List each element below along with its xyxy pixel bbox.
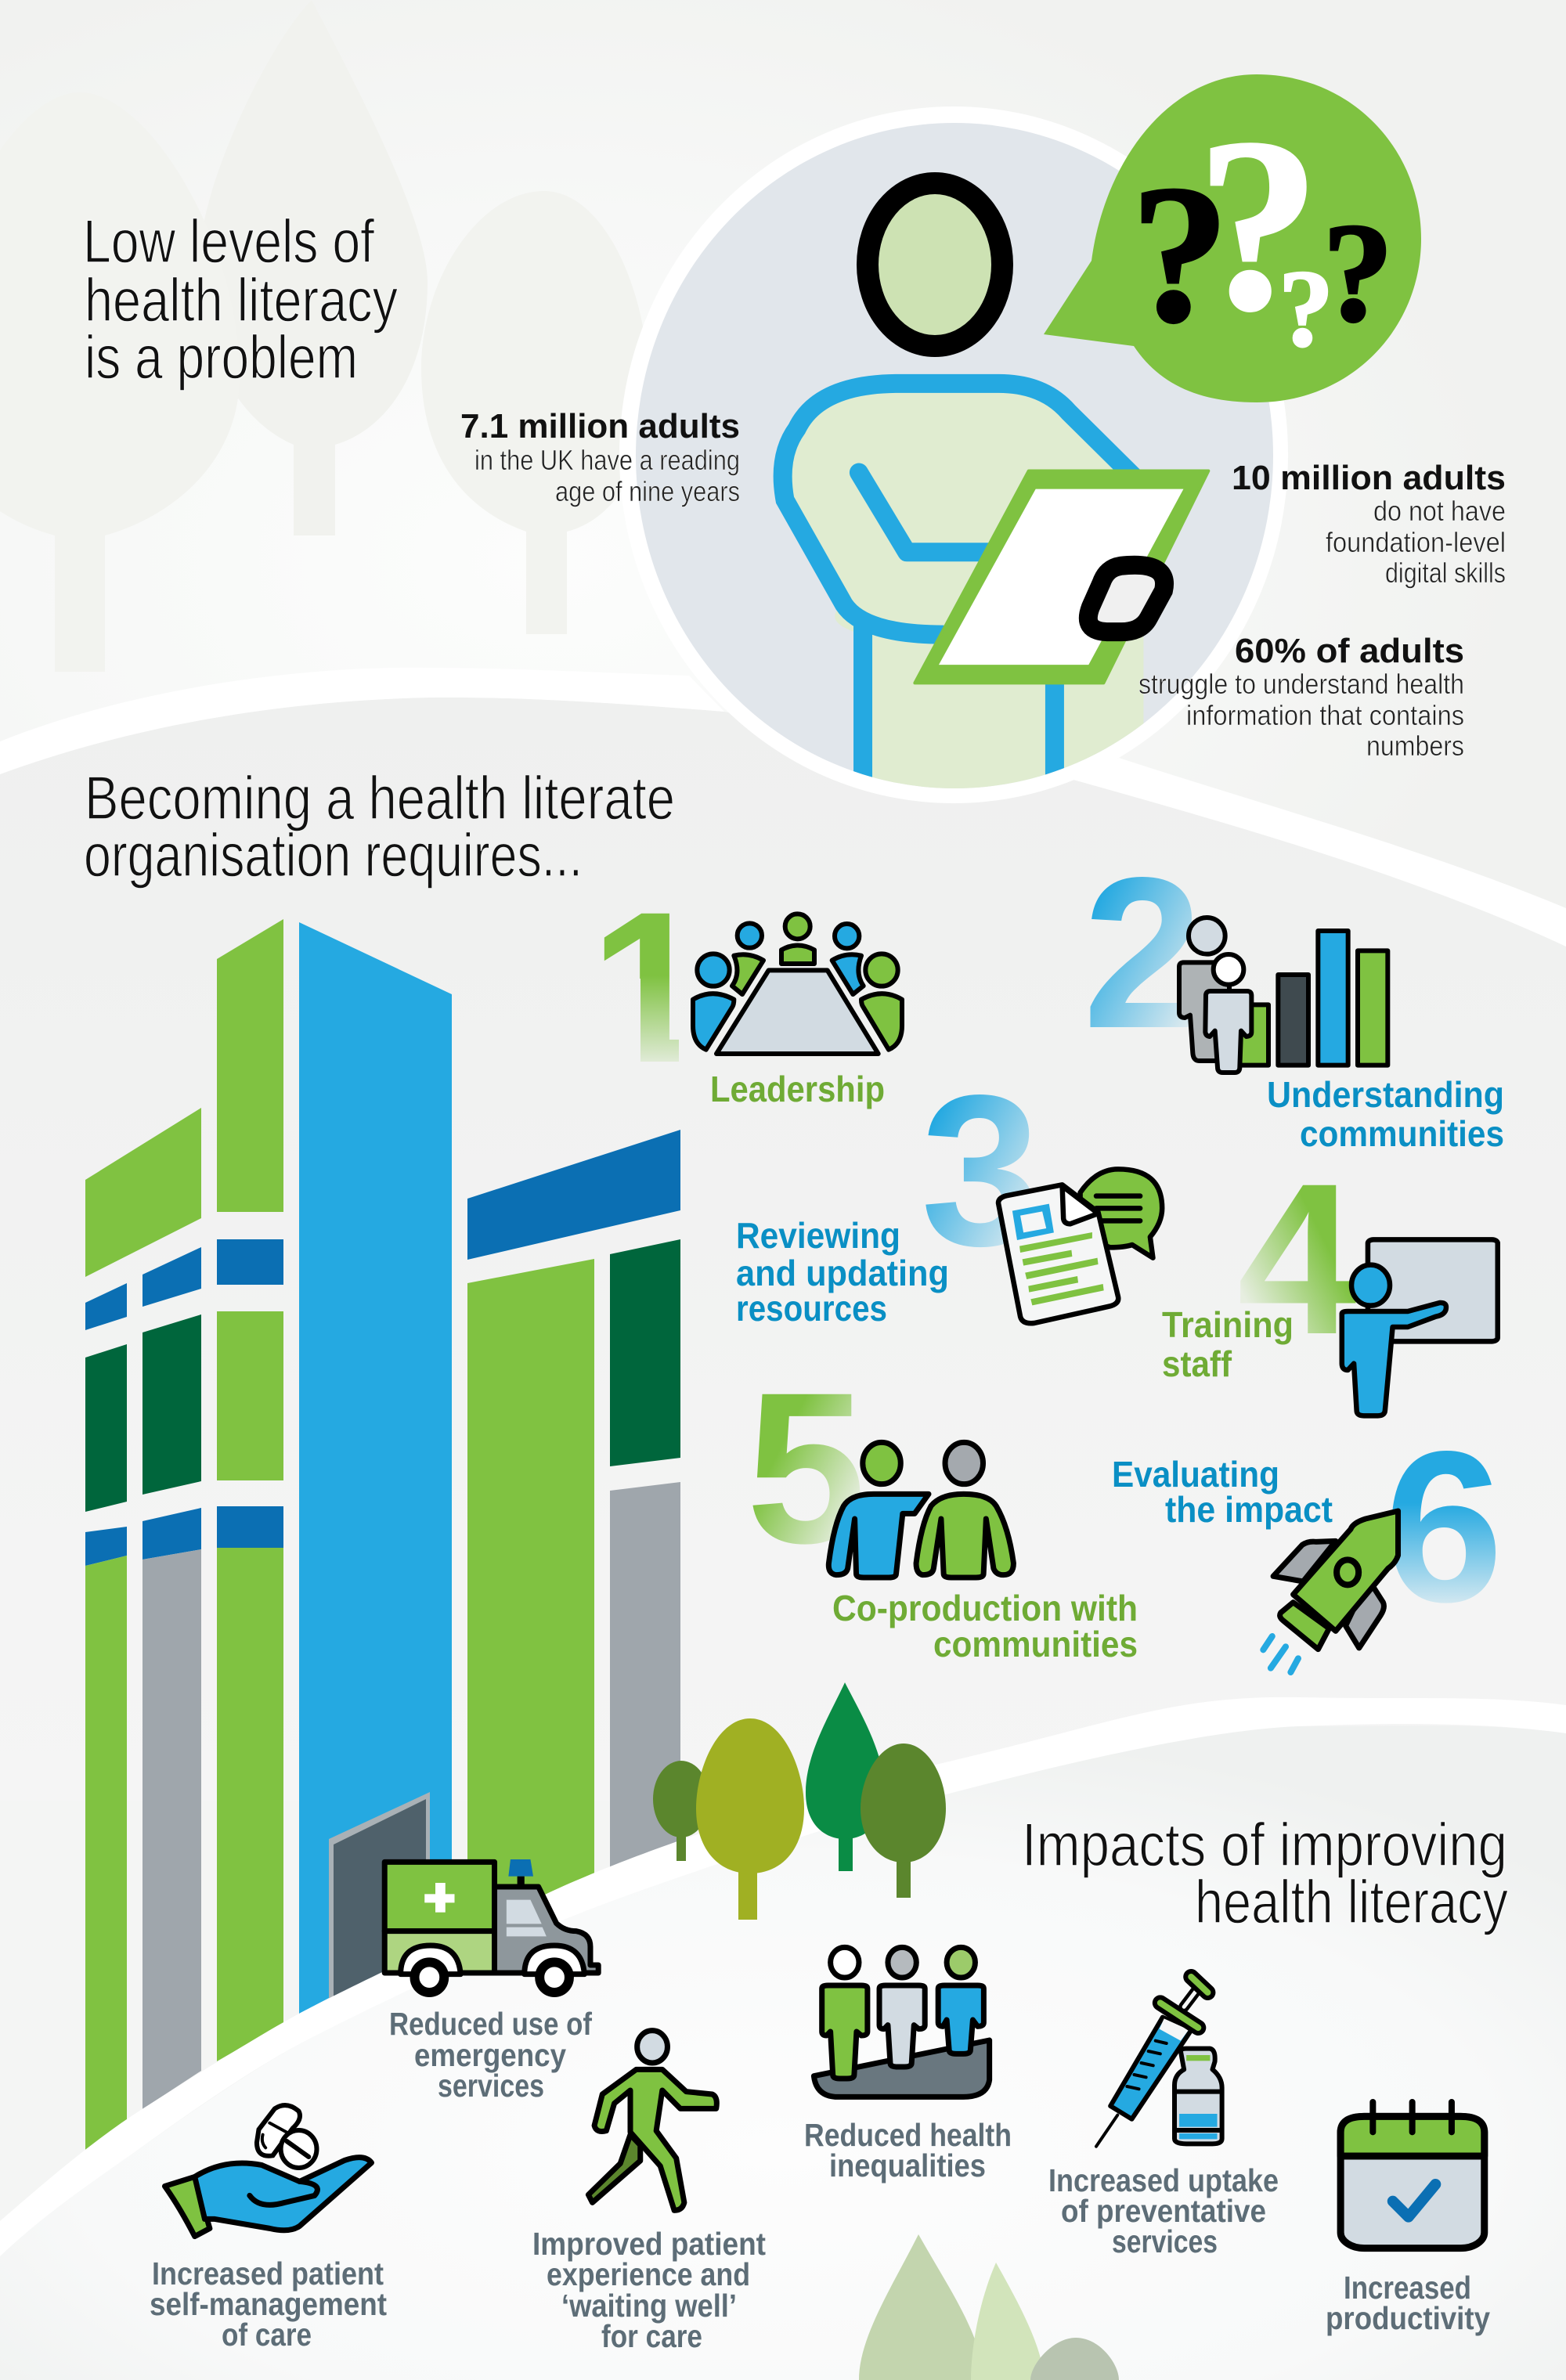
heading: impacts of improving health literacy [1022, 1810, 1508, 1936]
stat: 10 million adults: 10 million adults [1232, 459, 1506, 497]
speech bubble with question marks: ? [1131, 144, 1229, 363]
speech bubble with question marks [1044, 74, 1421, 402]
number 1: 1 [590, 867, 709, 1108]
icon: ambulance [384, 1859, 598, 1992]
number 6: 6 [1384, 1407, 1503, 1647]
label: increased uptake of preventative services: services [1112, 2223, 1218, 2259]
label: co-production with communities: communities [933, 1624, 1138, 1664]
heading: becoming a health literate organisation: organisation requires... [84, 820, 583, 889]
label: improved patient experience: for care [601, 2318, 702, 2354]
label: evaluating the impact [1112, 1454, 1333, 1530]
label: reviewing and updating resources [736, 1215, 949, 1329]
background: top section [0, 0, 1566, 1018]
label: improved patient experience: Improved patient [532, 2226, 766, 2262]
background: bottom section [0, 1726, 1566, 2380]
label: leadership: Leadership [710, 1069, 885, 1109]
number 2: 2 [1083, 833, 1203, 1073]
icon: calendar with tick [1340, 2102, 1485, 2248]
icon: document and speech bubble [998, 1169, 1162, 1323]
stat: 10 million adults: do not have [1373, 495, 1506, 527]
label: reduced use of emergency services: Reduced use of [389, 2006, 592, 2042]
person with clipboard [783, 183, 1208, 797]
icon: rocket [1263, 1511, 1398, 1672]
clipboard [915, 471, 1208, 683]
person illustration circle: grey disc [636, 123, 1273, 788]
label: improved patient experience: ‘waiting well’ [561, 2288, 737, 2324]
label: evaluating the impact: the impact [1165, 1489, 1333, 1530]
title: low levels: Low levels of [83, 207, 374, 276]
label: reviewing and updating resources: and updating [736, 1253, 949, 1293]
label: increased uptake of preventative services [1048, 2162, 1279, 2259]
building [85, 919, 680, 2150]
stat: 10 million adults: digital skills [1385, 557, 1506, 589]
speech bubble with question marks: ? [1279, 248, 1333, 370]
icon: three people on a slope [814, 1947, 990, 2097]
label: increased productivity [1326, 2270, 1490, 2336]
label: understanding communities: Understanding [1267, 1074, 1504, 1115]
stat: 7.1 million adults: 7.1 million adults [460, 407, 740, 445]
number 3: 3 [921, 1051, 1041, 1291]
number 5: 5 [746, 1348, 866, 1588]
label: increased uptake of preventative services: Increased uptake [1048, 2162, 1279, 2198]
label: co-production with communities [832, 1588, 1138, 1664]
label: improved patient experience: experience and [547, 2256, 750, 2292]
white curved band, upper left [0, 668, 724, 774]
stat: 60% of adults [1138, 632, 1464, 762]
pale trees, bottom [859, 2234, 1119, 2380]
label: increased productivity: Increased [1344, 2270, 1471, 2306]
label: reviewing and updating resources: Reviewing [736, 1215, 900, 1256]
label: reduced use of emergency services [389, 2006, 592, 2104]
label: reduced health inequalities: inequalities [829, 2147, 986, 2183]
label: understanding communities [1267, 1074, 1504, 1154]
label: reduced use of emergency services: services [438, 2068, 544, 2104]
speech bubble with question marks: ? [1196, 88, 1320, 362]
person head [868, 183, 1002, 346]
label: training staff [1162, 1304, 1294, 1384]
icon: two people co-production [828, 1442, 1013, 1578]
label: understanding communities: communities [1300, 1113, 1504, 1154]
label: increased patient self-management: Increased patient [152, 2256, 384, 2292]
label: improved patient experience [532, 2226, 766, 2354]
stat: 60% of adults: numbers [1366, 730, 1464, 762]
building door [329, 1792, 430, 2004]
icon: people and bar chart [1179, 918, 1387, 1073]
label: reduced use of emergency services: emergency [414, 2037, 566, 2073]
title: low levels: is a problem [85, 323, 358, 391]
stat: 60% of adults: 60% of adults [1235, 632, 1464, 670]
heading: impacts of improving health literacy: health literacy [1195, 1867, 1508, 1936]
icon: walking person [588, 2031, 716, 2210]
label: increased productivity: productivity [1326, 2300, 1490, 2336]
white curved band, lower [0, 1697, 1566, 2256]
label: increased patient self-management: self-management [150, 2286, 387, 2322]
icon: hand with pills [164, 2105, 371, 2237]
label: increased patient self-management: of care [222, 2317, 312, 2353]
heading: becoming a health literate organisation: Becoming a health literate [85, 763, 675, 832]
label: increased uptake of preventative services: of preventative [1061, 2193, 1266, 2229]
pale background trees [0, 0, 649, 672]
person illustration circle: white ring [619, 106, 1288, 803]
stat: 7.1 million adults: in the UK have a reading [474, 444, 740, 476]
label: co-production with communities: Co-production with [832, 1588, 1138, 1628]
stat: 60% of adults: information that contains [1186, 699, 1464, 731]
person body [783, 384, 1143, 797]
white curved band, upper right [1073, 758, 1566, 947]
background: middle section [0, 698, 1566, 1801]
label: training staff: staff [1162, 1343, 1232, 1384]
stat: 7.1 million adults: age of nine years [555, 475, 740, 507]
icon: leadership meeting table [693, 914, 902, 1054]
stat: 60% of adults: struggle to understand health [1138, 668, 1464, 700]
label: increased patient self-management [150, 2256, 387, 2353]
label: reviewing and updating resources: resources [736, 1288, 887, 1329]
icon: syringe and vial [1096, 1977, 1222, 2147]
label: evaluating the impact: Evaluating [1112, 1454, 1279, 1495]
coloured trees [653, 1682, 946, 1920]
title: low levels: health literacy [85, 265, 398, 334]
stat: 10 million adults [1232, 459, 1506, 589]
speech bubble with question marks: ? [1322, 195, 1394, 352]
heading: becoming a health literate organisation [84, 763, 675, 889]
label: reduced health inequalities: Reduced health [804, 2117, 1012, 2153]
label: reduced health inequalities [804, 2117, 1012, 2183]
title: low levels [83, 207, 398, 391]
number 4: 4 [1237, 1139, 1359, 1379]
stat: 7.1 million adults [460, 407, 740, 507]
label: training staff: Training [1162, 1304, 1294, 1345]
stat: 10 million adults: foundation-level [1326, 526, 1506, 558]
icon: trainer at board [1342, 1239, 1498, 1415]
